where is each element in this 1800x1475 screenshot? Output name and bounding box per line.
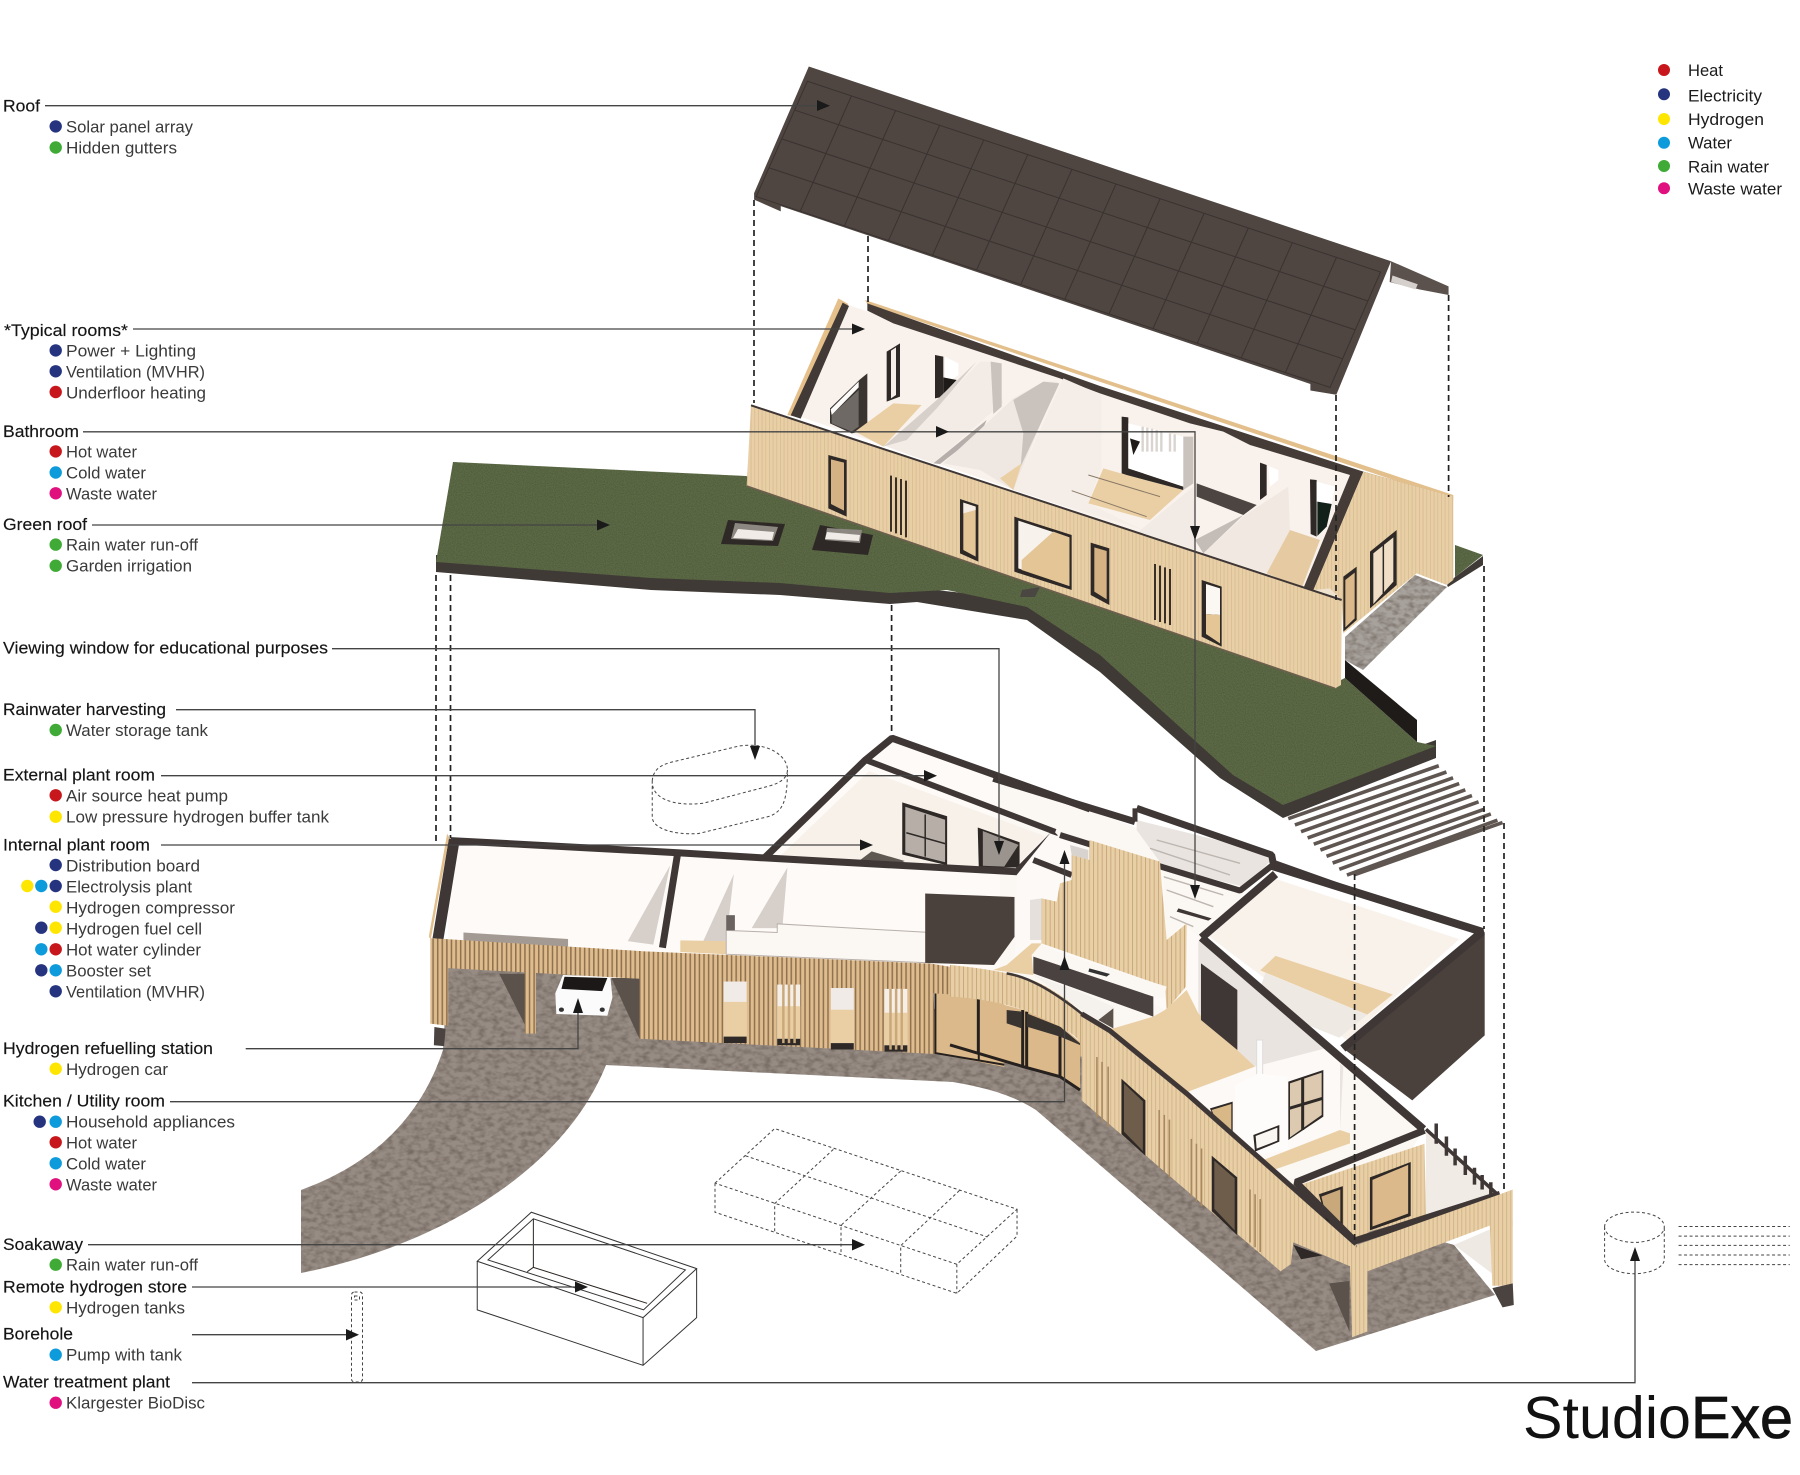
slatted fascia west	[932, 964, 1004, 998]
east long rim	[1202, 938, 1423, 1129]
remote hydrogen store tank	[477, 1212, 697, 1365]
carport gravel patch	[463, 933, 568, 948]
exploded layer: louvred canopy	[1288, 766, 1503, 875]
drain outlet	[1020, 587, 1040, 597]
north room floor	[1260, 956, 1393, 1015]
ground floor: north room and east wing	[1209, 865, 1485, 1100]
label: External plant room	[3, 766, 329, 826]
leader: water treatment plant	[192, 1247, 1640, 1383]
logo: StudioExe: StudioExe	[1523, 1385, 1793, 1451]
end bridge beam	[1356, 1189, 1513, 1271]
floor mid	[1000, 463, 1022, 490]
east base	[1000, 775, 1423, 1245]
large window	[1122, 417, 1193, 490]
item: cold water: Cold water	[66, 1155, 146, 1174]
dark wall segment	[1197, 483, 1257, 515]
glazing frames east	[950, 998, 1080, 1090]
end room wall	[1426, 1129, 1497, 1216]
end wing timber wall	[1313, 472, 1453, 633]
glazing west part	[935, 993, 1004, 1067]
leader: hydrogen refuelling station	[246, 998, 583, 1049]
label: Kitchen / Utility room	[3, 1092, 235, 1195]
item: hot water: Hot water	[66, 442, 137, 462]
label: Green roof: Green roof	[3, 515, 87, 534]
leader: typical rooms	[133, 324, 865, 334]
legend: rain water: Rain water	[1688, 157, 1769, 176]
east dark edge	[1447, 556, 1483, 587]
item: ventilation: Ventilation (MVHR)	[66, 982, 205, 1001]
label: Bathroom	[3, 422, 157, 504]
timber floor	[680, 940, 726, 954]
label: Soakaway	[3, 1235, 198, 1275]
timber wall	[747, 405, 1342, 688]
black upstand	[1345, 660, 1417, 742]
dark door	[1201, 963, 1237, 1050]
leader: soakaway	[88, 1239, 865, 1250]
label: Hydrogen refuelling station: Hydrogen refuelling station	[3, 1039, 213, 1058]
end wing corner shade	[1313, 588, 1342, 600]
end room rim	[1296, 1130, 1500, 1241]
leader: rainwater harvesting	[176, 710, 760, 760]
dark room	[726, 915, 735, 930]
label: Typical rooms	[4, 321, 206, 402]
front windows	[724, 982, 907, 1052]
item: hot water: Hot water	[66, 1134, 137, 1153]
chimney block	[1235, 1073, 1288, 1155]
item: electrolysis plant: Electrolysis plant	[66, 877, 192, 896]
end column	[1490, 1221, 1513, 1286]
west base	[448, 742, 1090, 1024]
label: Typical rooms: *Typical rooms*	[4, 321, 128, 340]
solar panel grid	[756, 81, 1381, 387]
right dark rim	[1303, 472, 1363, 591]
door opening	[830, 373, 867, 433]
glazing blind	[1007, 1010, 1022, 1028]
room interior	[800, 305, 1350, 588]
fascia east	[950, 965, 1083, 1057]
white core	[1007, 833, 1198, 1013]
partition 1	[887, 362, 1003, 463]
soakaway crates outline	[715, 1129, 1017, 1293]
slat windows	[891, 476, 1170, 625]
leader: roof	[45, 100, 830, 111]
column shadow on gravel	[1329, 1281, 1349, 1332]
item: hydrogen car: Hydrogen car	[66, 1060, 168, 1079]
item: hydrogen tanks: Hydrogen tanks	[66, 1299, 185, 1318]
north room dark cladding	[1342, 932, 1485, 1100]
item: air source heat pump: Air source heat pump	[66, 786, 228, 806]
exploded layer: upper floor rooms	[787, 298, 1453, 588]
item: solar panel array: Solar panel array	[66, 118, 193, 136]
legend: water: Water	[1688, 134, 1732, 153]
wall slats	[1097, 1057, 1260, 1252]
label: Viewing window: Viewing window for educational purposes	[3, 638, 328, 658]
landing bar	[1177, 908, 1212, 921]
gravel strip behind upper wing	[1345, 575, 1447, 670]
green roof dark edge	[436, 555, 1436, 818]
item: underfloor heating: Underfloor heating	[66, 384, 206, 402]
floor left	[855, 403, 922, 447]
ground floor: west rooms	[429, 738, 1090, 1067]
label: Internal plant room	[3, 836, 235, 1001]
legend: electricity: Electricity	[1688, 87, 1763, 106]
plant room windows	[902, 802, 1020, 867]
item: booster set: Booster set	[66, 961, 151, 980]
label: Bathroom: Bathroom	[3, 422, 79, 441]
east green triangle	[1455, 545, 1483, 577]
big partition	[1013, 378, 1143, 530]
cross bar	[1033, 860, 1072, 875]
partition 3	[1138, 487, 1197, 550]
left timber sliver	[429, 834, 449, 939]
skylight 1	[721, 520, 785, 546]
leader: internal plant room	[161, 840, 873, 850]
label: Green roof	[3, 515, 198, 576]
carport timber band	[430, 938, 642, 1026]
rear room wall shadows	[628, 865, 670, 945]
flue	[1257, 1040, 1263, 1080]
leader: remote hydrogen store	[192, 1282, 588, 1292]
leader: bathroom	[83, 426, 1200, 899]
item: hydrogen compressor: Hydrogen compressor	[66, 898, 235, 917]
partition 4	[1203, 487, 1290, 573]
bedroom floor	[1088, 468, 1183, 520]
small window	[1260, 463, 1278, 500]
north living rim	[1202, 874, 1276, 938]
ground floor base interior	[448, 742, 1423, 1245]
gravel driveway	[301, 965, 1495, 1351]
label: Roof	[3, 96, 193, 158]
grey wall	[1198, 940, 1343, 1130]
skylight 2	[812, 525, 873, 555]
white island floor	[1033, 975, 1113, 1028]
stove frame	[1253, 1125, 1279, 1152]
feature timber wall	[1042, 840, 1187, 1010]
item: ventilation: Ventilation (MVHR)	[66, 362, 205, 382]
rear dark band	[867, 303, 1447, 502]
dashed explosion guide lines	[436, 200, 1504, 1242]
leader: borehole	[192, 1329, 359, 1340]
hydrogen car	[555, 975, 612, 1016]
item: pump with tank: Pump with tank	[66, 1346, 182, 1365]
ground floor: kitchen, living room	[950, 778, 1350, 1170]
living room floor	[1263, 1130, 1350, 1170]
legend	[1658, 61, 1782, 198]
upper floor front wall	[747, 405, 1342, 688]
roof slope	[754, 66, 1391, 395]
item: hot water cylinder: Hot water cylinder	[66, 940, 201, 959]
floor east	[1267, 530, 1320, 588]
end wing windows	[1343, 530, 1397, 632]
item: rain water run-off: Rain water run-off	[66, 1256, 198, 1275]
item: hidden gutters: Hidden gutters	[66, 138, 177, 158]
item: waste water: Waste water	[66, 1176, 157, 1195]
wall top line	[751, 405, 1342, 600]
north room interior	[1209, 879, 1459, 1040]
rear rims	[1060, 835, 1350, 891]
leader: green roof	[92, 520, 610, 530]
kitchen counter	[1032, 947, 1167, 1017]
leader: external plant room	[161, 770, 937, 782]
item: power and lighting: Power + Lighting	[66, 342, 196, 360]
label: Kitchen / Utility room: Kitchen / Utility room	[3, 1092, 165, 1111]
plant room wall	[777, 771, 1045, 868]
diagonal timber wall	[1082, 1014, 1356, 1271]
leader: viewing window	[332, 649, 1004, 855]
left column foot	[434, 1027, 446, 1046]
glazing east	[950, 997, 1080, 1090]
label: Hydrogen refuelling station	[3, 1039, 213, 1079]
stair treads	[1150, 840, 1240, 927]
rear timber strip	[865, 300, 1453, 500]
label: Water treatment plant: Water treatment plant	[3, 1373, 170, 1392]
label: Borehole: Borehole	[3, 1325, 73, 1344]
upper floor, eastern rooms	[1072, 417, 1453, 633]
water treatment tank outline	[1605, 1212, 1790, 1274]
exploded layer: roof with solar array	[754, 66, 1449, 395]
ground floor: diagonal wall and end wing	[1082, 874, 1514, 1337]
item: waste water: Waste water	[66, 484, 157, 504]
wall windows	[828, 455, 1222, 647]
item: klargester biodisc: Klargester BioDisc	[66, 1394, 205, 1413]
roof gable end	[1390, 261, 1449, 295]
partition 1 shadow	[883, 362, 977, 447]
back room window	[1210, 1102, 1233, 1138]
door	[1310, 479, 1335, 537]
fascia top edge	[1007, 973, 1083, 1015]
living room window	[1288, 1070, 1323, 1140]
exploded layer: green roof	[436, 462, 1483, 818]
label: Soakaway: Soakaway	[3, 1235, 84, 1254]
item: household appliances: Household appliances	[66, 1113, 235, 1132]
plant equipment	[859, 851, 905, 863]
item: hydrogen fuel cell: Hydrogen fuel cell	[66, 919, 202, 938]
left dark rim	[791, 303, 849, 419]
dark carport	[1293, 1245, 1322, 1259]
rim walls	[451, 833, 1055, 872]
item: rain water run-off: Rain water run-off	[66, 536, 198, 554]
grey recess	[1070, 845, 1088, 860]
item: distribution board: Distribution board	[66, 856, 200, 875]
kitchen floor	[993, 943, 1042, 975]
carport interior wall	[1454, 1229, 1492, 1274]
big timber floor	[1110, 990, 1255, 1093]
item: garden irrigation: Garden irrigation	[66, 556, 192, 576]
label: Water treatment plant	[3, 1373, 205, 1413]
label: Roof: Roof	[3, 96, 40, 116]
shadow behind partition 4	[1195, 515, 1243, 553]
label: Internal plant room: Internal plant room	[3, 836, 150, 854]
item: cold water: Cold water	[66, 464, 146, 482]
legend: waste water: Waste water	[1688, 179, 1782, 198]
end column foot	[1492, 1283, 1514, 1307]
carport column	[525, 969, 536, 1034]
corner column	[1349, 1246, 1367, 1337]
green roof surface	[436, 462, 1436, 805]
top edge of diagonal wall	[1082, 1014, 1356, 1244]
end room cladding	[1301, 1144, 1426, 1242]
carport shadows	[499, 974, 530, 1034]
label: Borehole	[3, 1325, 182, 1365]
stair void	[1137, 820, 1272, 887]
diagonal wall windows	[1121, 1079, 1237, 1235]
item: low pressure buffer tank: Low pressure hydrogen buffer tank	[66, 808, 329, 826]
label: External plant room: External plant room	[3, 766, 155, 785]
living room back wall	[1183, 1048, 1340, 1160]
floor rails	[1072, 475, 1160, 517]
stepped brise soleil	[1426, 1123, 1497, 1194]
label: Rainwater harvesting: Rainwater harvesting	[3, 700, 166, 719]
end room windows	[1319, 1162, 1411, 1230]
north room rims	[1270, 865, 1482, 1048]
legend: hydrogen: Hydrogen	[1688, 110, 1764, 129]
label: Remote hydrogen store: Remote hydrogen store	[3, 1277, 187, 1296]
roof underside sliver	[1391, 276, 1418, 289]
partition 2	[943, 382, 1058, 490]
low partition	[726, 924, 930, 963]
item: water storage tank: Water storage tank	[66, 721, 208, 740]
partition 2 shadow	[1013, 382, 1059, 467]
rear windows, left room	[887, 343, 958, 402]
diagonal shadow	[933, 420, 987, 464]
leader: kitchen utility room	[170, 850, 1070, 1102]
dark store cupboards	[925, 893, 1014, 965]
label: Remote hydrogen store	[3, 1277, 187, 1318]
glazing west frames	[935, 993, 1004, 1065]
front slatted wall	[639, 951, 935, 1054]
wall foot shadow	[747, 486, 1335, 688]
left timber edge	[787, 298, 848, 417]
rainwater tank outline	[652, 745, 787, 834]
legend: heat: Heat	[1688, 61, 1723, 80]
borehole outline	[352, 1292, 362, 1382]
label: Rainwater harvesting	[3, 700, 208, 740]
